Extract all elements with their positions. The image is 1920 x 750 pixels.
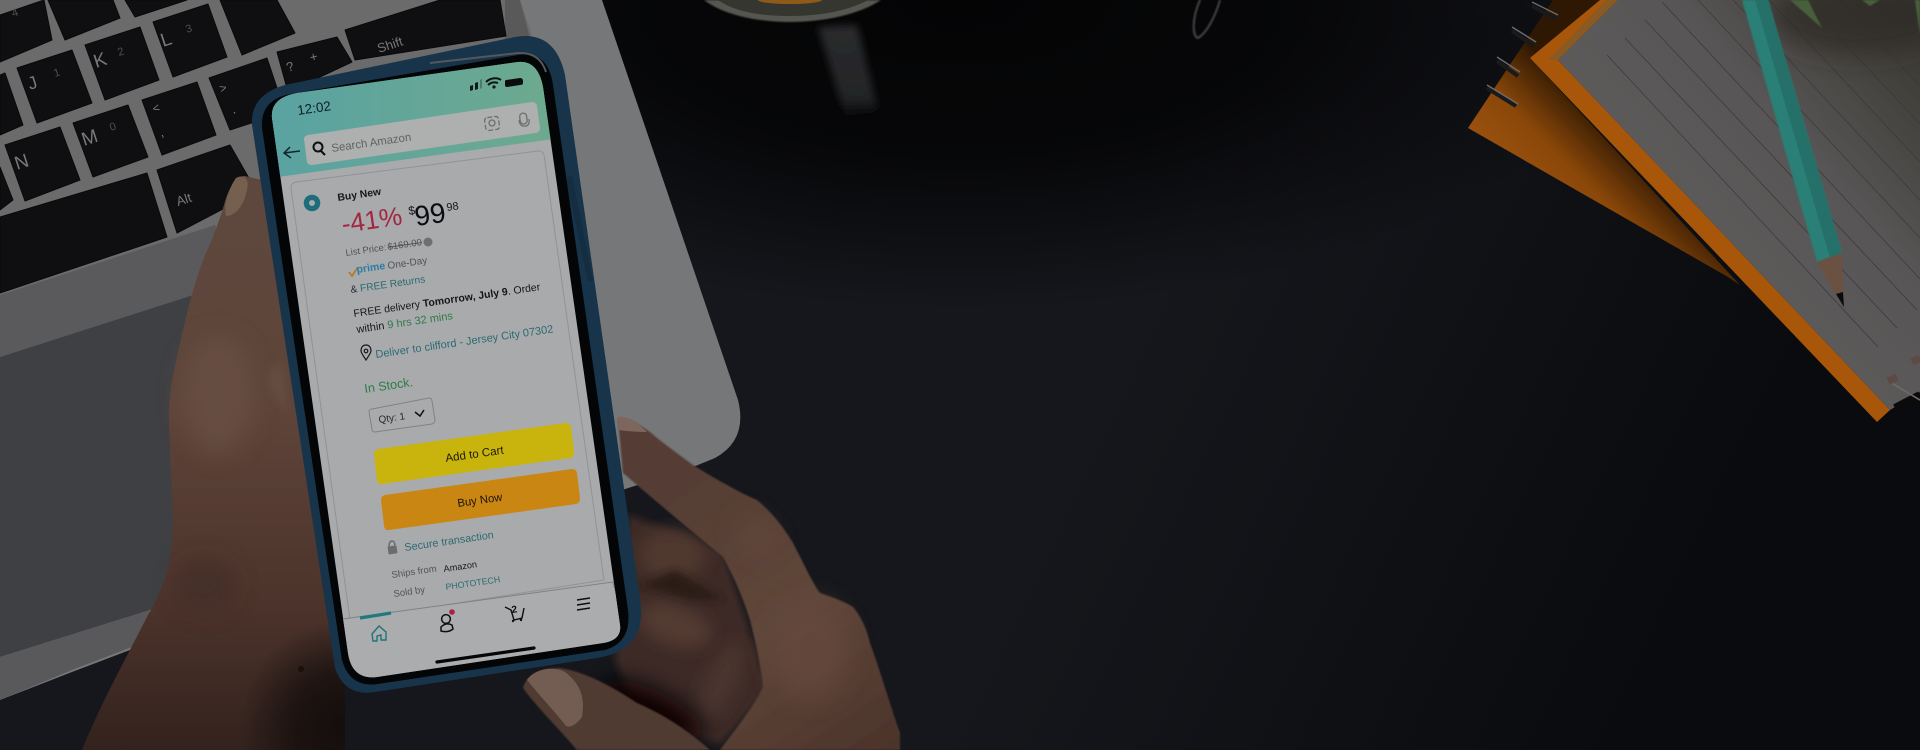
seller info: Ships from	[391, 564, 437, 581]
lower fingers base	[615, 515, 770, 745]
key legends	[10, 7, 405, 209]
leaves	[1790, 0, 1920, 35]
lower notebook	[1468, 0, 1740, 285]
pencil	[1742, 0, 1844, 307]
quantity selector	[369, 398, 435, 432]
deliver to: Deliver to clifford - Jersey City 07302	[375, 323, 554, 361]
key legends: 4	[10, 7, 20, 20]
delivery text	[354, 284, 540, 333]
key legends: ,	[157, 124, 165, 140]
key legends: L	[158, 29, 175, 52]
laptop	[0, 0, 740, 700]
in stock: In Stock.	[363, 375, 414, 396]
cart icon: 2	[511, 604, 518, 616]
key legends: 0	[108, 121, 118, 134]
price: 99	[412, 197, 448, 232]
left hand and thumb	[82, 176, 345, 750]
laptop deck	[0, 0, 740, 700]
secure transaction: Secure transaction	[404, 529, 495, 554]
palm rest strip	[0, 225, 240, 357]
plant stem loop	[1194, 0, 1220, 38]
back arrow	[284, 147, 300, 158]
right thumb	[523, 668, 710, 750]
delivery text: within 9 hrs 32 mins	[355, 310, 454, 336]
fingers modelling	[588, 529, 754, 750]
key legends: 1	[52, 67, 62, 80]
key legends: Alt	[174, 190, 194, 209]
search icon	[314, 142, 325, 155]
cart icon	[505, 604, 524, 622]
buy now button: Buy Now	[457, 492, 504, 510]
bottom nav	[343, 582, 620, 678]
search bar	[304, 102, 540, 165]
key legends: 3	[184, 23, 194, 36]
add to cart button	[374, 423, 574, 484]
microphone icon	[519, 113, 529, 126]
seller info	[392, 562, 500, 597]
status time: 12:02	[296, 98, 332, 118]
app header	[272, 62, 550, 177]
active tab bar	[360, 613, 391, 618]
phone bezel	[262, 54, 629, 684]
key legends: Shift	[375, 33, 405, 56]
plant shadow	[1770, 0, 1920, 55]
key legends: +	[308, 49, 319, 65]
camera icon	[484, 116, 500, 131]
price: -41%	[340, 201, 404, 239]
key legends: N	[12, 151, 32, 175]
key legends: <	[151, 100, 162, 116]
add to cart button: Add to Cart	[445, 444, 505, 465]
trackpad	[0, 295, 240, 657]
price	[343, 202, 458, 230]
list price: $169.00	[387, 237, 423, 253]
keyboard keys	[0, 0, 506, 293]
key legends: ?	[284, 58, 296, 75]
list price	[346, 238, 432, 256]
coffee mug	[704, 0, 881, 116]
ruled lines	[1607, 0, 1920, 347]
home indicator	[437, 648, 534, 662]
prime one-day: prime	[356, 260, 386, 276]
notification dot	[449, 609, 455, 615]
notebooks	[1468, 0, 1920, 422]
key legends: 2	[116, 46, 126, 59]
product panel	[291, 151, 604, 620]
phone	[252, 36, 641, 693]
key legends: >	[218, 80, 229, 96]
paper page	[1558, 0, 1920, 410]
prime one-day	[349, 255, 428, 276]
price: $	[407, 203, 416, 218]
spiral binding	[1487, 2, 1920, 408]
right hand fingers	[588, 417, 900, 750]
prime one-day: One-Day	[387, 255, 428, 272]
free returns: & FREE Returns	[350, 274, 426, 296]
home icon	[372, 626, 386, 641]
menu icon	[577, 598, 590, 610]
price: 98	[446, 200, 460, 214]
buy new label: Buy New	[337, 187, 383, 204]
seller info: PHOTOTECH	[445, 574, 501, 592]
key legends: J	[25, 72, 40, 94]
list price: List Price:	[345, 241, 387, 258]
key legends: K	[91, 49, 110, 73]
quantity selector: Qty: 1	[378, 411, 406, 426]
radio button	[304, 195, 320, 211]
phone case	[252, 36, 641, 693]
seller info: Sold by	[393, 585, 426, 600]
key legends: M	[79, 126, 101, 151]
status icons	[470, 78, 523, 91]
location pin	[361, 345, 371, 360]
account icon	[441, 615, 453, 632]
key legends: .	[229, 101, 237, 117]
upper notebook cover	[1530, 0, 1890, 422]
keyboard surround	[0, 0, 540, 300]
front lip	[0, 610, 150, 700]
search placeholder: Search Amazon	[331, 132, 412, 155]
buy now button	[381, 469, 580, 530]
lock icon	[387, 541, 398, 555]
seller info: Amazon	[443, 559, 478, 574]
index finger and back of hand	[618, 418, 900, 750]
delivery text: FREE delivery Tomorrow, July 9. Order	[353, 281, 541, 320]
phone screen	[272, 62, 620, 678]
